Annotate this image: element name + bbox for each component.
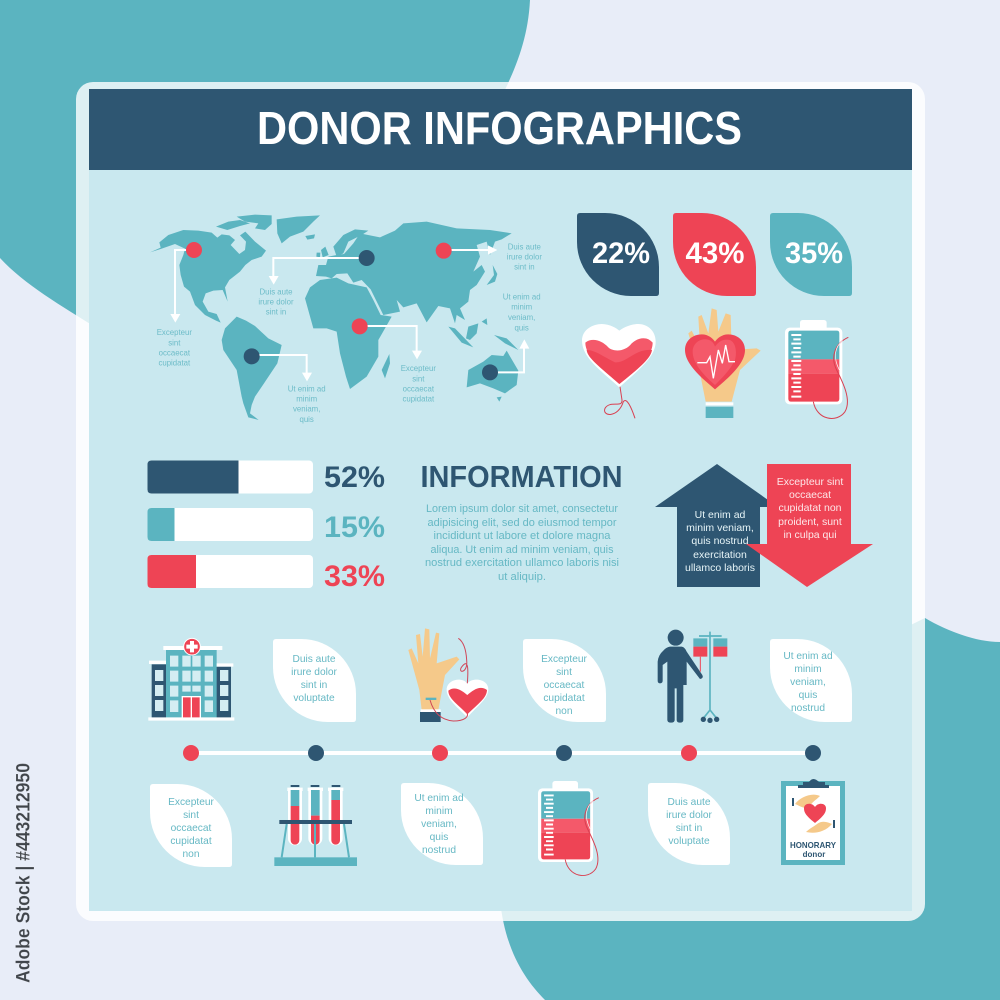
text box: duis aute xyxy=(273,639,356,722)
icon: patient with drip stand xyxy=(658,630,727,723)
card frame xyxy=(76,82,925,921)
africa xyxy=(305,278,392,389)
information heading: INFORMATION xyxy=(420,459,622,494)
eurasia xyxy=(316,222,512,323)
up arrow with text xyxy=(655,464,778,587)
text box: excepteur lower: cupidatat xyxy=(170,836,212,847)
main panel xyxy=(89,89,912,911)
sumatra xyxy=(448,327,473,347)
percentage tile: 43%: 43% xyxy=(686,237,744,270)
map arrowheads xyxy=(170,245,529,381)
text box: duis aute: Duis aute xyxy=(292,654,336,665)
title banner xyxy=(89,89,912,170)
icon: hand holding heart xyxy=(685,308,761,418)
percentage tile: 22% xyxy=(577,213,659,296)
icon: heart blood bag xyxy=(582,324,656,418)
map labels: occaecat xyxy=(403,384,435,393)
tasmania xyxy=(497,397,502,402)
text box: ut enim lower: minim xyxy=(425,806,453,817)
text box: duis aute lower: Duis aute xyxy=(667,797,711,808)
map labels: Excepteur xyxy=(157,328,192,337)
text box: excepteur: Excepteur xyxy=(541,654,588,665)
text box: duis aute lower: irure dolor xyxy=(666,810,713,821)
madagascar xyxy=(382,354,390,378)
icon: hand with heart bag xyxy=(408,628,488,722)
title: DONOR INFOGRAPHICS xyxy=(257,102,742,154)
icon: honorary donor clipboard: donor xyxy=(803,850,825,859)
text box: ut enim lower: Ut enim ad xyxy=(414,793,464,804)
map labels: sint xyxy=(412,374,425,383)
percentage tile: 43% xyxy=(673,213,756,296)
map labels xyxy=(157,242,542,424)
progress bar: 15% xyxy=(148,508,385,544)
map labels: quis xyxy=(299,415,314,424)
greenland xyxy=(277,215,320,243)
text box: excepteur lower xyxy=(150,784,232,867)
map labels: sint xyxy=(168,338,181,347)
text box: ut enim ad: nostrud xyxy=(791,703,825,714)
text box: ut enim ad: Ut enim ad xyxy=(783,651,833,662)
borneo and philippines xyxy=(466,318,487,340)
iceland xyxy=(305,234,315,240)
down arrow with text: proident, sunt xyxy=(778,516,842,528)
map labels: irure dolor xyxy=(507,252,542,261)
information paragraph: Lorem ipsum dolor sit amet, consectetur xyxy=(426,503,618,515)
text box: ut enim ad: quis xyxy=(799,690,817,701)
text box: ut enim ad: veniam, xyxy=(790,677,826,688)
map labels: veniam, xyxy=(293,405,320,414)
text box: ut enim ad xyxy=(770,639,852,722)
icon: honorary donor clipboard xyxy=(781,779,845,865)
icon: test tubes xyxy=(274,785,357,866)
text box: duis aute lower: sint in xyxy=(676,823,702,834)
information paragraph xyxy=(425,503,619,583)
map labels: irure dolor xyxy=(258,297,294,306)
percentage tile: 35%: 35% xyxy=(785,237,843,270)
map callout arrows xyxy=(175,250,524,373)
down arrow with text: occaecat xyxy=(789,489,831,501)
text box: excepteur lower: Excepteur xyxy=(168,797,215,808)
text box: ut enim ad: minim xyxy=(794,664,822,675)
new guinea xyxy=(494,335,518,350)
progress bar: 33%: 33% xyxy=(324,560,385,593)
up arrow with text: exercitation xyxy=(693,549,747,561)
percentage tile: 35% xyxy=(770,213,852,296)
text box: duis aute: voluptate xyxy=(293,693,335,704)
japan xyxy=(487,265,497,285)
information paragraph: ut aliquip. xyxy=(498,571,546,583)
arctic islands xyxy=(216,215,272,230)
progress bar: 33% xyxy=(148,555,385,593)
text box: excepteur lower: occaecat xyxy=(171,823,212,834)
uk and ireland xyxy=(316,247,329,257)
timeline xyxy=(183,745,821,761)
map labels: Ut enim ad xyxy=(503,292,541,301)
information paragraph: adipisicing elit, sed do eiusmod tempor xyxy=(428,517,617,529)
text box: excepteur xyxy=(523,639,606,722)
map labels: cupidatat xyxy=(402,395,435,404)
map labels: minim xyxy=(511,303,532,312)
text box: excepteur: occaecat xyxy=(544,680,585,691)
south america xyxy=(222,317,282,420)
text box: duis aute lower xyxy=(648,783,730,865)
information paragraph: nostrud exercitation ullamco laboris nisi xyxy=(425,557,619,569)
map labels: Excepteur xyxy=(401,364,436,373)
map labels: Duis aute xyxy=(259,287,293,296)
map labels: quis xyxy=(514,323,529,332)
information paragraph: incididunt ut labore et dolore magna xyxy=(434,530,611,542)
map labels: Ut enim ad xyxy=(288,384,326,393)
down arrow with text: cupidatat non xyxy=(778,502,842,514)
icon: blood bag lower xyxy=(538,781,599,876)
world map with callouts xyxy=(150,215,542,424)
text box: excepteur: non xyxy=(556,706,572,717)
progress bar: 15%: 15% xyxy=(324,511,385,544)
background blob: bottom right xyxy=(500,618,1000,1000)
text box: excepteur lower: non xyxy=(182,849,200,860)
map labels: sint in xyxy=(266,308,286,317)
icon: blood bag xyxy=(785,320,848,418)
up arrow with text: quis nostrud xyxy=(691,535,749,547)
icon: honorary donor clipboard: HONORARY xyxy=(790,840,836,850)
icon: hospital xyxy=(148,638,234,721)
map labels: occaecat xyxy=(159,348,191,357)
north america xyxy=(150,230,266,323)
progress bar: 52% xyxy=(148,460,385,494)
percentage tile: 22%: 22% xyxy=(592,237,650,270)
text box: ut enim lower xyxy=(401,783,483,865)
map labels: Duis aute xyxy=(508,242,541,251)
text box: ut enim lower: veniam, xyxy=(421,819,457,830)
progress bar: 52%: 52% xyxy=(324,461,385,494)
text box: duis aute lower: voluptate xyxy=(668,836,710,847)
map markers xyxy=(186,242,498,380)
text box: duis aute: sint in xyxy=(301,680,327,691)
information paragraph: aliqua. Ut enim ad minim veniam, quis xyxy=(430,544,614,556)
background blob: top left xyxy=(0,0,530,330)
text box: ut enim lower: nostrud xyxy=(422,845,456,856)
map labels: sint in xyxy=(514,262,535,271)
text box: excepteur lower: sint xyxy=(183,810,199,821)
up arrow with text: minim veniam, xyxy=(686,522,754,534)
stock id text: Adobe Stock | #443212950 xyxy=(14,763,34,983)
text box: excepteur: sint xyxy=(556,667,572,678)
text box: ut enim lower: quis xyxy=(430,832,448,843)
down arrow with text: Excepteur sint xyxy=(777,476,843,488)
australia xyxy=(467,351,518,393)
up arrow with text: ullamco laboris xyxy=(685,562,755,574)
map labels: veniam, xyxy=(508,313,535,322)
map labels: cupidatat xyxy=(158,359,191,368)
text box: excepteur: cupidatat xyxy=(543,693,585,704)
map labels: minim xyxy=(296,395,317,404)
text box: duis aute: irure dolor xyxy=(291,667,338,678)
down arrow with text xyxy=(746,464,873,587)
up arrow with text: Ut enim ad xyxy=(695,509,746,521)
down arrow with text: in culpa qui xyxy=(783,529,837,541)
scandinavia xyxy=(333,229,368,257)
